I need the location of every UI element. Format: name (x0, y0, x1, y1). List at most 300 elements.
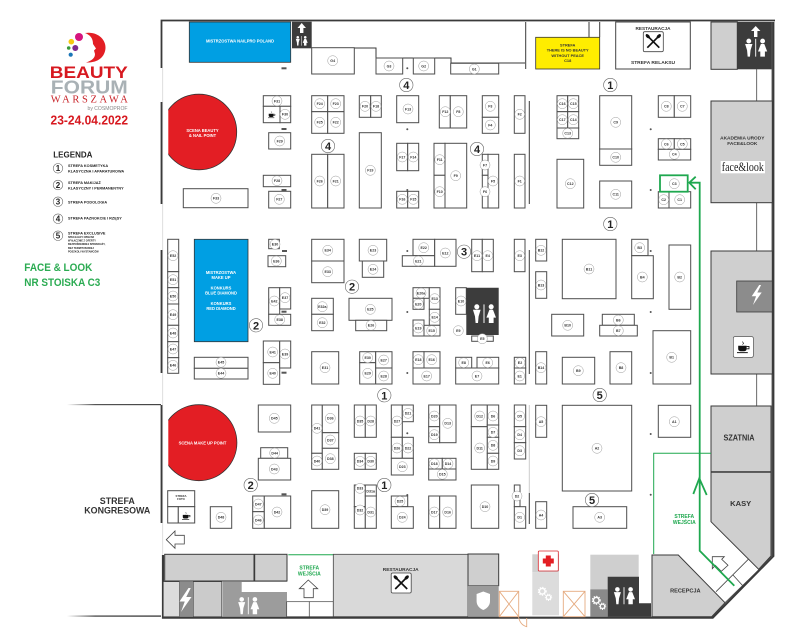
booths D27 D21: D21 (405, 412, 411, 416)
booths F11 F10 F9: F9 (454, 174, 458, 178)
booths C16 C15 C17 C14 C13: C13 (564, 132, 571, 136)
icon: toilets (238, 597, 259, 614)
booths E22 E21 E12: E22 (420, 246, 427, 250)
legend item 3: 3 (56, 198, 61, 207)
logo: Beauty Forum Warszawa (50, 33, 129, 127)
blue panel: Mistrzostwa Nailpro Poland (189, 22, 291, 62)
booths D2 D1: D1 (517, 516, 522, 520)
zone number markers: 1 (607, 219, 613, 231)
strefa foto with coffee: STREFA (175, 494, 187, 498)
booths C6 C5 C4: C4 (672, 153, 677, 157)
booth F27: F27 (276, 198, 282, 202)
restaurant top: Strefa relaksu (616, 22, 690, 69)
zone number markers: 4 (325, 141, 332, 153)
booth F28 (263, 175, 291, 187)
booth E9: E9 (456, 329, 461, 333)
booths F12 F8: F12 (442, 110, 448, 114)
booths E18 E16 E17: E16 (428, 358, 435, 362)
booth B12 (536, 239, 547, 261)
booths E45 E44: E45 (218, 361, 224, 365)
booths E42 E37 E38: E38 (276, 318, 283, 322)
booths D26 D22 D23 (391, 437, 413, 475)
booths E22 E21 E12 (402, 239, 456, 266)
booth A4: A4 (539, 513, 543, 517)
booth G1 (451, 63, 499, 74)
legend item 5 (53, 231, 106, 254)
booths E45 E44: E44 (218, 372, 224, 376)
red stage: Scena Beauty & Nail Point: SCENA BEAUTY (186, 128, 219, 133)
booth F19: F19 (367, 169, 373, 173)
booth D48: D48 (218, 516, 224, 520)
booth A3 (573, 507, 627, 528)
booths F3 F4 (482, 96, 499, 133)
booth B9: B9 (576, 369, 581, 373)
booths E52 to E46 column: E47 (170, 347, 176, 351)
akademia urody face&look (711, 101, 772, 203)
booths E2 E1 (514, 357, 526, 384)
booth E36: E36 (273, 259, 280, 263)
booths E23 E24: E23 (370, 249, 376, 253)
legend item 1 (53, 164, 124, 173)
booths D2 D1: D2 (515, 494, 519, 498)
legend item 4: 4 (56, 215, 61, 224)
legend title: LEGENDA (53, 150, 93, 160)
booths D41 D40 D36 D37 D38 (312, 405, 339, 469)
booths B6 B7: B6 (616, 318, 621, 322)
stand callout: Face & Look: NR STOISKA C3 (24, 277, 100, 289)
blue panel: Mistrzostwa Make Up and Konkurs: MAKE UP (212, 275, 231, 280)
booths zone D (168, 405, 526, 528)
booths F24 F23 F25 F22: F23 (333, 102, 339, 106)
booths F20 F18: F18 (373, 105, 379, 109)
red stage: Scena Beauty & Nail Point: & NAIL POINT (189, 133, 217, 138)
booth E36 (268, 256, 286, 267)
storage box 2 (563, 591, 585, 617)
booths E52 to E46 column (168, 239, 179, 373)
logo word WARSZAWA: WARSZAWA (51, 95, 128, 106)
zone number markers: 1 (607, 80, 613, 92)
booths C16 C15 C17 C14 C13: C15 (570, 102, 577, 106)
booths E18 E16 E17: E17 (423, 374, 430, 378)
booths F7 F6 F5: F7 (483, 163, 487, 167)
booths E41 E40 E39 (263, 341, 291, 384)
booths F31 F30: F31 (274, 99, 280, 103)
booths C8 C7: C8 (664, 105, 669, 109)
booths F7 F6 F5 (480, 154, 499, 208)
booths F31 F30: F30 (282, 113, 288, 117)
booths D5 D4 D3: D5 (517, 414, 522, 418)
yellow panel: There is no beauty without peace: THERE IS NO BEAUTY (547, 48, 589, 53)
zone number markers: 5 (597, 390, 603, 402)
legend item 4 (53, 214, 122, 224)
reception (652, 555, 725, 617)
booths D12 D11 D6 D7 D8 D9: D7 (491, 431, 495, 435)
booths C8 C7 (658, 96, 691, 117)
booths E8 E6 E7 (456, 357, 499, 384)
booths D47 D46 D42: D47 (255, 502, 262, 506)
booths F16 F15: F15 (410, 198, 416, 202)
booth D10: D10 (482, 505, 488, 509)
booths D41 D40 D36 D37 D38: D41 (314, 427, 320, 431)
booths B3 B4: B4 (640, 275, 645, 279)
booth B9 (562, 357, 595, 384)
booth E3: E3 (517, 254, 522, 258)
arrowhead on route (693, 478, 707, 495)
booths F17 F14: F14 (410, 155, 416, 159)
booth E5 (472, 334, 493, 344)
legend item 2: 2 (56, 181, 61, 190)
zone number markers: 4 (474, 144, 481, 156)
booths D41 D40 D36 D37 D38: D38 (327, 457, 334, 461)
booths E52 to E46 column: E48 (170, 331, 176, 335)
booths E2 E1: E2 (518, 361, 522, 365)
booths D33 D32 D31a D31: D31a (366, 489, 376, 493)
booths D41 D40 D36 D37 D38: D40 (314, 459, 320, 463)
booth E5: E5 (480, 337, 485, 341)
booths F16 F15: F16 (399, 198, 405, 202)
zone number markers: 2 (349, 282, 355, 294)
booths C16 C15 C17 C14 C13: C14 (570, 118, 577, 122)
booths D47 D46 D42: D46 (255, 518, 262, 522)
booths D33 D32 D31a D31: D33 (357, 487, 363, 491)
booths E34 E33 (312, 239, 344, 283)
booths D5 D4 D3 (514, 405, 526, 459)
strefa wejścia label: WEJŚCIA (673, 519, 696, 526)
booths F20 F18: F20 (362, 105, 368, 109)
restaurant bottom (333, 554, 468, 617)
booths D44 D43: D43 (271, 467, 278, 471)
booths E20a E20 E13 E14 E19 E15 (413, 288, 440, 336)
icon: power bolt (180, 588, 192, 612)
booth B13: B13 (538, 283, 544, 287)
booths D12 D11 D6 D7 D8 D9: D8 (491, 444, 495, 448)
booths C16 C15 C17 C14 C13: C16 (559, 102, 566, 106)
booth B8 (610, 352, 632, 384)
connector corridors right (757, 22, 772, 556)
booths D34 D30 (354, 453, 376, 469)
legend item 5: BEZPOŚREDNIEJ SPRZEDAŻY, (68, 243, 106, 246)
booths F11 F10 F9 (434, 143, 467, 208)
blue panel: Mistrzostwa Make Up and Konkurs: KONKURS (211, 286, 232, 290)
booth A4 (536, 502, 547, 528)
akademia urody face&look: face&look (722, 160, 764, 174)
booths E20a E20 E13 E14 E19 E15: E19 (415, 326, 422, 330)
zone number markers: 5 (589, 495, 595, 507)
booth E10: E10 (458, 299, 464, 303)
booths C2 C1 (658, 192, 691, 208)
booth G (312, 48, 354, 74)
booths E22 E21 E12: E12 (442, 251, 449, 255)
zone number markers: 1 (381, 480, 387, 492)
booth B11: B11 (586, 267, 592, 271)
booths E2 E1: E1 (517, 374, 522, 378)
booths E41 E40 E39: E41 (269, 350, 276, 354)
booths F24 F23 F25 F22: F25 (317, 121, 323, 125)
legend item 5: BEZ TERMITUSOWEJ (68, 247, 94, 250)
booths D18 D14 D15: D18 (431, 462, 438, 466)
booth B12: B12 (538, 249, 544, 253)
arrowhead at stand (689, 177, 696, 189)
booth D39: D39 (322, 508, 328, 512)
booth G3 (376, 58, 403, 74)
zone number markers: 2 (248, 480, 254, 492)
booth F29: F29 (277, 139, 283, 143)
booths F12 F8 (439, 96, 467, 128)
stand C3 highlighted: C3 (672, 182, 677, 186)
booth E31: E31 (322, 366, 328, 370)
booths D5 D4 D3: D3 (517, 449, 522, 453)
reception: RECEPCJA (670, 589, 701, 595)
red stage: Scena Make Up Point: SCENA MAKE UP POINT (179, 440, 227, 445)
booths E8 E6 E7: E7 (475, 374, 479, 378)
booths E20a E20 E13 E14 E19 E15: E13 (431, 297, 438, 301)
legend item 3 (53, 197, 107, 207)
booths E8 E6 E7: E6 (485, 361, 490, 365)
legend item 1: KLASYCZNA I APARATUROWA (68, 169, 124, 173)
blue panel: Mistrzostwa Make Up and Konkurs: RED DIAMOND (206, 306, 236, 311)
bottom service rooms left (163, 554, 287, 617)
booth A3: A3 (597, 516, 602, 520)
booths E52 to E46 column: E50 (170, 294, 176, 298)
booths F16 F15 (397, 191, 419, 208)
booths F17 F14 (397, 143, 419, 171)
legend item 5: POSZKOLI WYSTAWCÓW (68, 251, 99, 254)
booths D17 D16 (429, 496, 456, 528)
strefa wejścia bottom entrance (287, 555, 333, 617)
booths F26 F21: F21 (333, 179, 339, 183)
logo byline: by COSMOPROF (88, 106, 128, 112)
booth B14: B14 (538, 366, 544, 370)
booths D20 D19 D13: D19 (431, 433, 438, 437)
booths E42 E37 E38 (269, 288, 291, 325)
booth F13: F13 (405, 107, 411, 111)
booths D35 D29: D28 (367, 419, 374, 423)
booths B3 B4 (632, 239, 653, 299)
booth A1 (658, 405, 691, 437)
booth D45: D45 (271, 417, 278, 421)
booths D35 D29 (354, 405, 376, 437)
booths D41 D40 D36 D37 D38: D36 (327, 417, 334, 421)
strefa kongresowa label and walls: KONGRESOWA (84, 506, 151, 516)
security room with shield icon (468, 554, 499, 617)
booths D27 D21: D27 (394, 419, 400, 423)
legend item 1: STREFA KOSMETYKA (68, 164, 108, 168)
booths zone F and G (183, 48, 525, 208)
booth F29 (269, 133, 291, 149)
kasy (711, 472, 771, 569)
red stage: Scena Beauty & Nail Point (161, 94, 237, 170)
blue panel: Mistrzostwa Make Up and Konkurs: MISTRZOSTWA (206, 270, 236, 275)
legend item 2 (53, 180, 124, 190)
booths D33 D32 D31a D31: D32 (357, 508, 363, 512)
booths E25 E26 (349, 298, 392, 331)
booth E30 side: E30 (272, 243, 278, 247)
blue panel: Mistrzostwa Nailpro Poland: MISTRZOSTWA NAILPRO POLAND (206, 39, 274, 44)
booths E23 E24: E24 (370, 268, 376, 272)
zone number markers: 1 (381, 390, 387, 402)
hall outer walls (162, 20, 775, 618)
toilets top with up arrow (292, 22, 312, 48)
booth A2 (562, 405, 632, 491)
yellow panel: There is no beauty without peace: STREFA (560, 43, 576, 48)
booths D26 D22 D23: D22 (405, 446, 411, 450)
akademia urody face&look: FACE&LOOK (727, 141, 758, 147)
booth D48 (210, 507, 232, 528)
booths C2 C1: C1 (677, 198, 682, 202)
route line (690, 183, 734, 586)
booths D17 D16: D16 (444, 510, 451, 514)
booths D20 D19 D13: D13 (444, 422, 451, 426)
booth F19 (359, 133, 381, 208)
booths D41 D40 D36 D37 D38: D37 (327, 438, 334, 442)
legend (53, 150, 124, 254)
booth F28: F28 (274, 179, 280, 183)
booths zone C (557, 96, 691, 208)
booths E30 E29 E27 E28: E29 (364, 372, 371, 376)
first aid room (532, 551, 559, 615)
booth C11: C11 (612, 193, 619, 197)
booths F12 F8: F8 (456, 110, 460, 114)
booths E32a E32: E32 (319, 321, 326, 325)
pillars (282, 67, 652, 496)
booth E3 (514, 239, 525, 272)
booth A1: A1 (672, 420, 677, 424)
booth A5: A5 (539, 420, 543, 424)
booths B3 B4: B3 (637, 246, 642, 250)
blue panel: Mistrzostwa Make Up and Konkurs (194, 239, 248, 342)
booths zone E (168, 239, 526, 384)
legend item 5: STREFA EXCLUSIVE (68, 231, 106, 235)
booths C8 C7: C7 (680, 105, 685, 109)
blue panel: Mistrzostwa Make Up and Konkurs: KONKURS (211, 301, 232, 306)
zone number markers (244, 78, 617, 507)
booths D34 D30: D34 (357, 460, 363, 464)
booths F11 F10 F9: F10 (437, 190, 443, 194)
technical rooms and toilets bottom right (590, 555, 651, 617)
arrow: white entrance (712, 557, 728, 571)
zone number markers: 2 (253, 320, 259, 332)
booths C2 C1: C2 (661, 198, 666, 202)
booths E32a E32 (312, 298, 333, 331)
legend item 5: WYŁĄCZNIE Z OFERTY (68, 240, 96, 243)
booths E30 E29 E27 E28: E28 (380, 374, 387, 378)
restaurant top: Strefa relaksu: STREFA RELAKSU (631, 60, 676, 66)
booth F2 (514, 96, 525, 133)
blue panel: Mistrzostwa Make Up and Konkurs: BLUE DIAMOND (205, 290, 237, 296)
booths D17 D16: D17 (431, 510, 438, 514)
booth B8: B8 (619, 366, 623, 370)
booths F3 F4: F3 (488, 105, 492, 109)
booths C6 C5 C4: C5 (680, 142, 685, 146)
booth D45 (258, 405, 291, 432)
booths B6 B7 (600, 314, 637, 336)
logo word FORUM: FORUM (51, 76, 128, 97)
booths D26 D22 D23: D23 (399, 465, 406, 469)
booths D12 D11 D6 D7 D8 D9: D6 (491, 414, 495, 418)
booths C9 C10: C10 (612, 156, 619, 160)
booth B1 (653, 331, 691, 384)
booths E34 E33: E34 (324, 249, 331, 253)
booth C12: C12 (567, 182, 574, 186)
booth F13 (397, 96, 419, 123)
booths E42 E37 E38: E42 (271, 299, 278, 303)
booths E41 E40 E39: E39 (282, 352, 288, 356)
booth G2: G2 (421, 64, 426, 68)
booths D18 D14 D15 (429, 458, 456, 480)
booths E42 E37 E38: E37 (282, 296, 288, 300)
booth F2: F2 (518, 113, 522, 117)
kasy: KASY (730, 499, 751, 508)
yellow panel: There is no beauty without peace: C18 (564, 58, 572, 63)
red stage: Scena Make Up Point (161, 405, 237, 481)
booths D34 D30: D30 (367, 460, 374, 464)
booth E10 (456, 288, 466, 314)
booths F3 F4: F4 (488, 123, 492, 127)
booth G1: G1 (472, 67, 477, 71)
legend item 2: STREFA MAKIJAŻ (68, 181, 101, 185)
booths D27 D21 (391, 405, 413, 437)
booth B10: B10 (564, 324, 571, 328)
booths F17 F14: F17 (399, 155, 405, 159)
booths E30 E29 E27 E28: E30 (364, 356, 371, 360)
booths E20a E20 E13 E14 E19 E15: E15 (428, 329, 435, 333)
arrow: left to congress zone (166, 531, 184, 548)
booths C6 C5 C4 (658, 139, 691, 160)
booth G: G4 (330, 59, 335, 63)
booths E11 E4: E11 (474, 254, 480, 258)
booths E45 E44 (194, 357, 248, 379)
entrance lobby lines (716, 556, 773, 603)
booths F7 F6 F5: F5 (491, 179, 495, 183)
szatnia: SZATNIA (724, 433, 755, 442)
booths D25 D24: D24 (399, 516, 406, 520)
legend item 5: SPECJALNY OBSZAR (68, 236, 94, 239)
stand callout: Face & Look: FACE & LOOK (24, 262, 92, 274)
booth B1: B1 (669, 356, 674, 360)
top right grey room and toilets (711, 22, 772, 69)
green route to stand C3 (654, 175, 734, 586)
booths E34 E33: E33 (324, 270, 331, 274)
booths F20 F18 (359, 96, 381, 117)
booth E30 side (269, 239, 280, 249)
booths C6 C5 C4: C6 (664, 142, 669, 146)
booths D20 D19 D13: D20 (431, 414, 438, 418)
strefa kongresowa label and walls: STREFA (100, 496, 135, 506)
booths E20a E20 E13 E14 E19 E15: E20a (417, 291, 426, 295)
restaurant bottom: RESTAURACJA (383, 567, 419, 573)
booths E30 E29 E27 E28: E27 (380, 358, 387, 362)
booth B10 (552, 314, 584, 336)
booths D12 D11 D6 D7 D8 D9: D11 (476, 446, 483, 450)
booths C9 C10 (600, 96, 632, 165)
booths F26 F21: F26 (317, 179, 323, 183)
booths D33 D32 D31a D31 (354, 483, 376, 528)
strefa foto with coffee: FOTO (177, 497, 186, 501)
stand callout: Face & Look (24, 262, 100, 289)
booths E22 E21 E12: E21 (415, 259, 422, 263)
booths D35 D29: D35 (357, 419, 363, 423)
booths E20a E20 E13 E14 E19 E15: E20 (415, 302, 422, 306)
legend item 2: KLASYCZNY I PERMANENTNY (68, 186, 124, 190)
booth B14 (536, 352, 547, 384)
booths E18 E16 E17: E18 (415, 358, 422, 362)
booths D12 D11 D6 D7 D8 D9 (471, 405, 499, 469)
booths F24 F23 F25 F22: F24 (317, 102, 323, 106)
zone number markers: 3 (461, 247, 467, 259)
booth F1: F1 (518, 179, 522, 183)
grey room with power and coffee (711, 251, 772, 374)
booths F24 F23 F25 F22: F22 (333, 121, 339, 125)
